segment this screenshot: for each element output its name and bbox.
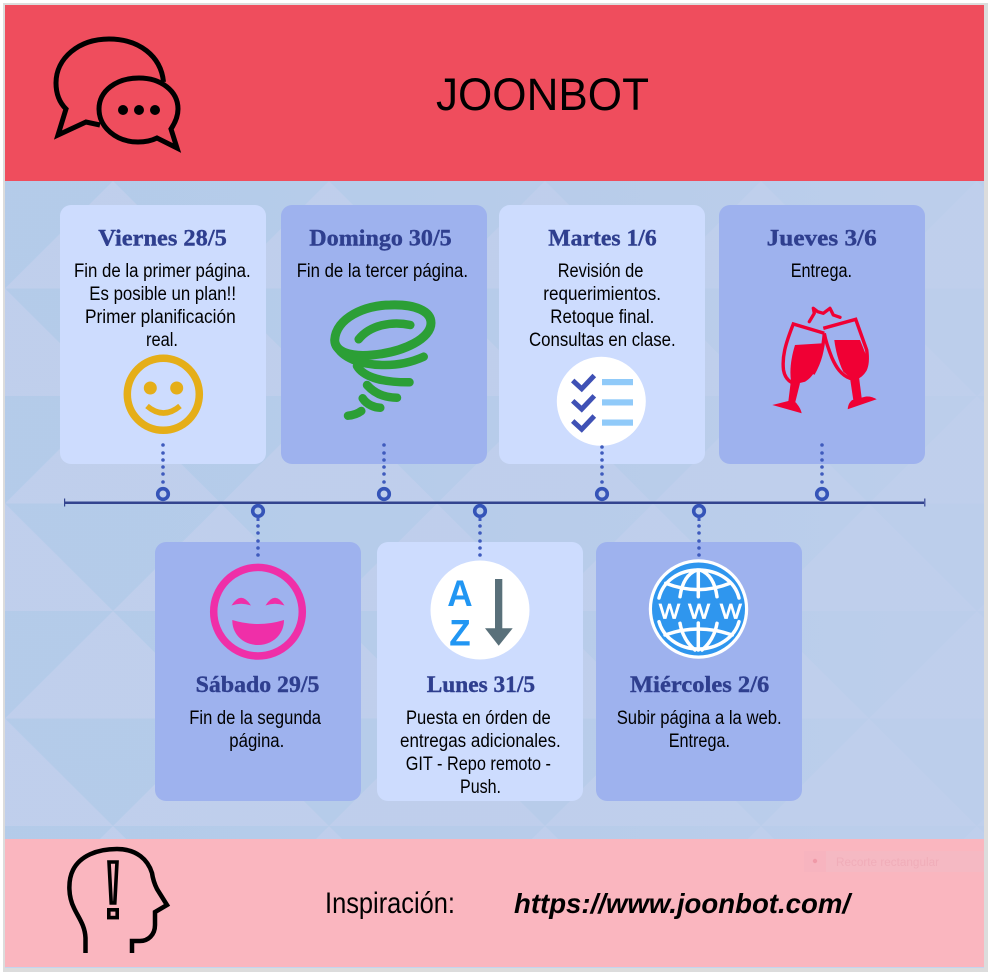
marker: Miércoles — [694, 506, 704, 557]
icon: checklist — [557, 357, 646, 446]
header band — [5, 5, 984, 181]
icon: chat bubbles — [56, 39, 178, 148]
panel: Viernes 28/5 — [60, 205, 266, 464]
icon: www globe: W — [659, 600, 680, 623]
text block: Viernes: Primer planificación — [85, 307, 236, 328]
heading: Jueves: Jueves 3/6 — [767, 226, 877, 252]
text block: Sábado — [189, 708, 321, 752]
text block: Lunes: Puesta en órden de — [406, 708, 551, 729]
panel: Jueves 3/6 — [719, 205, 925, 464]
text block: Viernes: real. — [146, 330, 178, 351]
icon: www globe — [649, 559, 748, 659]
heading: Domingo: Domingo 30/5 — [309, 226, 452, 252]
text block: Lunes — [400, 708, 561, 798]
icon: laughing face — [214, 567, 302, 656]
text block: Miércoles: Subir página a la web. — [617, 708, 782, 729]
heading: Lunes: Lunes 31/5 — [427, 672, 535, 698]
panel: Domingo 30/5 — [281, 205, 487, 464]
text block: Miércoles — [617, 708, 782, 752]
heading: Miércoles: Miércoles 2/6 — [630, 672, 770, 698]
marker: Viernes — [158, 443, 168, 499]
text: Inspiración label: Inspiración: — [325, 887, 455, 920]
icon: tornado — [335, 305, 431, 416]
text block: Martes — [529, 261, 676, 351]
text block: Viernes — [74, 261, 251, 351]
text block: Lunes: GIT - Repo remoto - — [406, 754, 551, 775]
footer band — [5, 839, 984, 968]
text block: Martes: Consultas en clase. — [529, 330, 676, 351]
background pattern panel — [5, 181, 984, 840]
panel: Martes 1/6 — [499, 205, 705, 464]
text block: Lunes: entregas adicionales. — [400, 731, 561, 752]
timeline axis — [64, 498, 926, 506]
text block: Sábado: Fin de la segunda — [189, 708, 321, 729]
marker: Domingo — [379, 443, 389, 499]
text block: Sábado: página. — [229, 731, 284, 752]
marker: Martes — [597, 445, 607, 499]
marker: Jueves — [817, 443, 827, 499]
icon: A-Z sort: Z — [449, 613, 471, 654]
heading: Martes: Martes 1/6 — [548, 226, 657, 252]
panel: Miércoles 2/6 — [596, 542, 802, 801]
marker: Lunes — [475, 506, 485, 557]
text block: Martes: requerimientos. — [543, 284, 661, 305]
ghost label: Recorte rectangular — [836, 857, 939, 869]
icon: A-Z sort — [430, 560, 530, 660]
text block: Martes: Retoque final. — [550, 307, 654, 328]
text: link: https://www.joonbot.com/ — [514, 888, 853, 919]
icon: A-Z sort: A — [447, 573, 473, 614]
icon: www globe: W — [688, 600, 710, 623]
text block: Domingo: Fin de la tercer página. — [297, 261, 468, 282]
icon: smiley — [127, 358, 199, 430]
text block: Martes: Revisión de — [558, 261, 643, 282]
timeline connectors and markers — [158, 443, 827, 557]
text block: Jueves: Entrega. — [791, 261, 852, 282]
ghost label — [804, 851, 984, 872]
heading: Sábado: Sábado 29/5 — [196, 672, 319, 698]
text block: Viernes: Es posible un plan!! — [89, 284, 236, 305]
icon: toasting glasses — [772, 308, 877, 413]
icon: www globe: W — [720, 600, 742, 623]
icon: head with exclamation mark — [69, 849, 167, 953]
text block: Viernes: Fin de la primer página. — [74, 261, 251, 282]
marker: Sábado — [253, 506, 263, 557]
panel: Lunes 31/5 — [377, 542, 583, 801]
title: JOONBOT — [436, 69, 649, 120]
heading: Viernes: Viernes 28/5 — [98, 226, 227, 252]
text block: Lunes: Push. — [460, 777, 501, 798]
panel: Sábado 29/5 — [155, 542, 361, 801]
text block: Miércoles: Entrega. — [669, 731, 730, 752]
